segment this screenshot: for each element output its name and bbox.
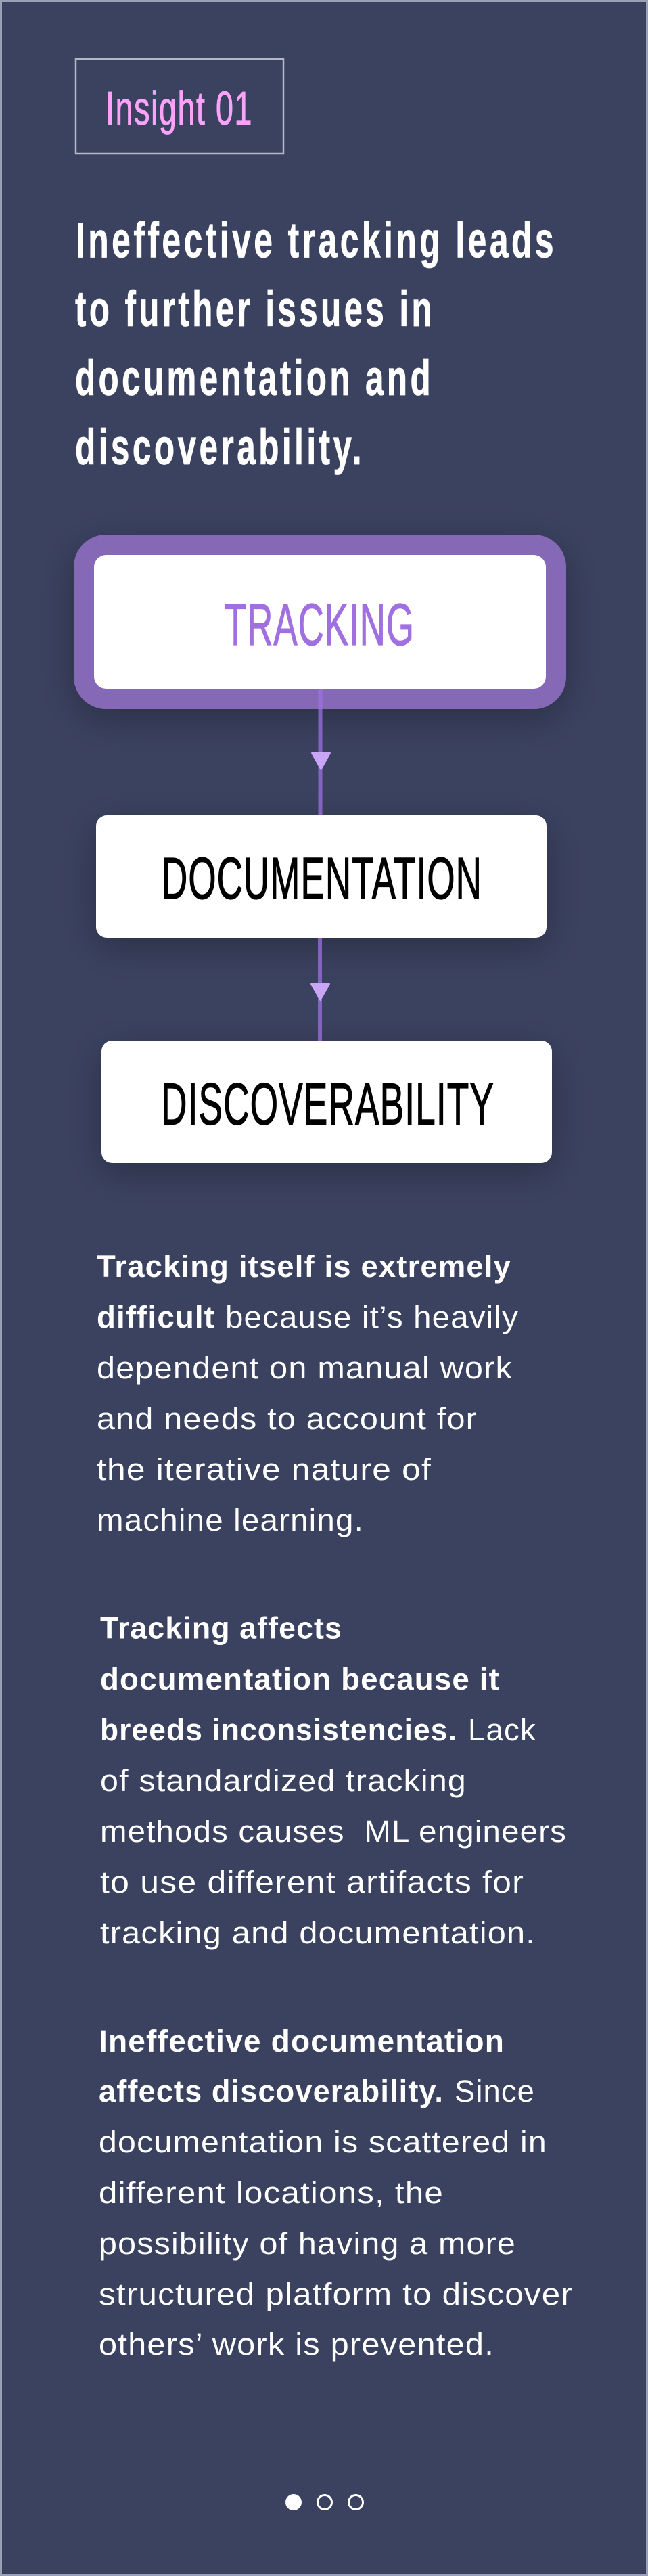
text block: tracking: difficult [97, 1300, 215, 1334]
text block: discoverability: affects discoverability. [99, 2074, 444, 2108]
text block: tracking [97, 1249, 519, 1537]
text block: discoverability: structured platform to discover [99, 2277, 573, 2311]
arrow: documentation to discoverability [311, 938, 329, 1041]
text block: documentation: breeds inconsistencies. [100, 1713, 457, 1747]
box: tracking: TRACKING [225, 592, 415, 658]
badge: Insight 01: Insight 01 [106, 82, 253, 135]
text block: tracking: Tracking itself is extremely [97, 1249, 511, 1284]
box: documentation [96, 815, 547, 938]
text block: documentation [100, 1610, 567, 1950]
text block: discoverability: different locations, the [99, 2175, 444, 2210]
text block: discoverability: documentation is scattered in [99, 2125, 547, 2159]
text block: documentation: of standardized tracking [100, 1763, 467, 1798]
text block: documentation: Lack [468, 1713, 536, 1747]
text block: documentation: to use different artifacts for [100, 1865, 524, 1899]
text block: tracking: and needs to account for [97, 1401, 478, 1436]
text block: discoverability [99, 2024, 573, 2362]
text block: tracking: the iterative nature of [97, 1452, 432, 1487]
heading [75, 212, 557, 475]
text block: discoverability: others’ work is prevented. [99, 2327, 494, 2362]
arrow: tracking to documentation [312, 689, 330, 815]
text block: discoverability: Since [455, 2074, 535, 2108]
badge: Insight 01 [76, 59, 283, 154]
text block: discoverability: Ineffective documentation [99, 2024, 505, 2058]
text block: tracking: machine learning. [97, 1503, 364, 1537]
text block: documentation: tracking and documentation. [100, 1916, 536, 1950]
flow diagram [74, 535, 566, 1163]
text block: tracking: because it’s heavily [225, 1300, 519, 1334]
text block: documentation: documentation because it [100, 1662, 500, 1696]
heading: to further issues in [75, 281, 435, 337]
text block: documentation: Tracking affects [100, 1610, 342, 1646]
text block: discoverability: possibility of having a more [99, 2226, 516, 2261]
pagination dots [285, 2494, 363, 2510]
heading: documentation and [75, 350, 434, 406]
heading: discoverability. [75, 419, 365, 475]
text block: tracking: dependent on manual work [97, 1351, 513, 1385]
text block: documentation: methods causes ML engineers [100, 1814, 567, 1849]
box: tracking [74, 535, 566, 709]
box: discoverability [101, 1041, 552, 1163]
